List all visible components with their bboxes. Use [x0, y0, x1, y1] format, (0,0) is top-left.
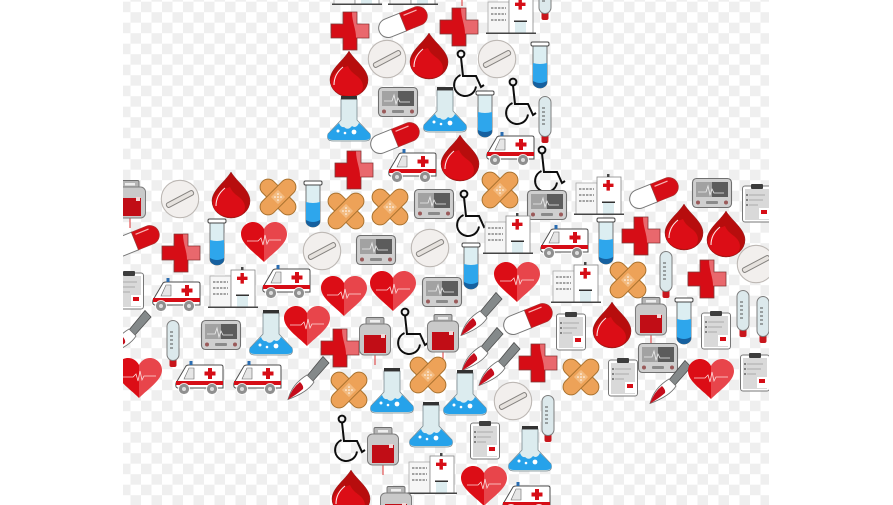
icon: pill [378, 6, 428, 38]
icon: scalpel [110, 310, 151, 354]
icon: test tube [531, 42, 549, 88]
icon: monitor [414, 190, 454, 218]
icon: hospital [551, 262, 601, 303]
icon: thermometer [167, 320, 179, 367]
icon: ambulance [153, 278, 200, 312]
icon: thermometer [660, 252, 672, 298]
icon: flask [328, 96, 370, 141]
icon: tablet [494, 382, 532, 420]
icon: test tube [304, 181, 322, 227]
icon: monitor [692, 178, 732, 208]
icon: heart [688, 359, 734, 399]
icon: monitor [378, 88, 418, 116]
icon: monitor [202, 320, 240, 350]
icon: thermometer [757, 296, 769, 343]
icon: flask [250, 310, 292, 355]
icon: monitor [356, 236, 396, 264]
icon: clipboard [608, 358, 638, 396]
icon: ambulance [176, 361, 223, 394]
icon: monitor [528, 190, 566, 220]
icon: ambulance [234, 361, 281, 394]
icon: thermometer [539, 0, 551, 20]
icon: clipboard [114, 271, 144, 309]
icon: red cross [688, 260, 726, 298]
icon: hospital [388, 0, 438, 5]
icon: pill [627, 175, 681, 211]
icon: hospital [574, 174, 624, 215]
icon: thermometer [737, 290, 749, 337]
icon: test tube [675, 298, 693, 344]
icon: wheelchair [454, 51, 484, 96]
icon: wheelchair [535, 147, 565, 192]
icon: ambulance [389, 149, 436, 182]
icon: test tube [462, 243, 480, 289]
icon: scalpel [461, 292, 502, 336]
icon: pill [370, 122, 420, 154]
icon: wheelchair [457, 191, 487, 236]
icon: bandage [607, 259, 649, 301]
icon: clipboard [470, 421, 500, 459]
icon: red cross [162, 234, 200, 272]
icon: bandage [372, 188, 408, 226]
icon: ambulance [487, 132, 534, 166]
icon: red cross [331, 12, 369, 50]
icon: tablet [737, 245, 775, 283]
icon: blood drop [593, 302, 631, 348]
icon: monitor [638, 344, 678, 372]
icon: blood drop [410, 33, 448, 79]
icon: wheelchair [335, 416, 365, 461]
icon: bandage [260, 178, 296, 216]
icon: heart [284, 306, 330, 346]
icon: red cross [519, 344, 557, 382]
icon: tablet [368, 40, 406, 78]
icon: blood bag [368, 428, 398, 475]
icon: hospital [486, 0, 536, 34]
icon: thermometer [542, 396, 554, 442]
icon: blood drop [707, 211, 745, 257]
icon: bandage [328, 192, 364, 230]
icon: tablet [303, 232, 341, 270]
icon: flask [371, 368, 413, 413]
icon: red cross [321, 329, 359, 367]
icon: monitor [422, 278, 462, 306]
icon: tablet [411, 229, 449, 267]
icon: scalpel [462, 328, 503, 370]
icon: bandage [407, 354, 449, 396]
icon: blood bag [360, 318, 390, 365]
icon: heart [494, 262, 540, 302]
illustration: medical cross made of icons [123, 0, 769, 505]
icon: tablet [478, 40, 516, 78]
icon: red cross [440, 8, 478, 46]
icon: clipboard [740, 353, 770, 391]
icon: red cross [335, 151, 373, 189]
icon: heart [461, 466, 507, 505]
icon: heart [241, 222, 287, 262]
icon: hospital [208, 267, 258, 308]
icon: test tube [208, 219, 226, 265]
icon: wheelchair [398, 309, 428, 354]
icon: flask [424, 87, 466, 132]
icon: thermometer [539, 96, 551, 143]
icon: scalpel [288, 356, 329, 400]
icon: test tube [476, 91, 494, 137]
icon: tablet [161, 180, 199, 218]
icon: bandage [482, 172, 518, 208]
icon: hospital [332, 0, 382, 5]
checkerboard background [123, 0, 769, 505]
icon: bandage [560, 356, 602, 398]
icon: blood drop [212, 172, 250, 218]
icon: scalpel [650, 360, 691, 404]
icon: pill [501, 301, 555, 337]
icon: pill [108, 223, 162, 259]
icon: hospital [483, 213, 533, 254]
icon: blood bag [380, 486, 412, 505]
icon: clipboard [556, 312, 586, 350]
icon: blood drop [665, 204, 703, 250]
icon: ambulance [503, 482, 550, 505]
icon: blood drop [332, 470, 370, 505]
icon: bandage [328, 369, 370, 411]
icon: test tube [597, 218, 615, 264]
icon: ambulance [263, 265, 310, 298]
icon: ambulance [541, 225, 588, 258]
icon: hospital [407, 453, 457, 494]
icon: scalpel [479, 342, 520, 386]
icon: clipboard [702, 311, 730, 349]
icon: blood bag [636, 298, 666, 345]
icon cross [108, 0, 775, 505]
icon: flask [410, 402, 452, 447]
icon: blood bag [462, 0, 463, 6]
icon: flask [509, 426, 551, 471]
icon: blood bag [428, 314, 458, 362]
icon: clipboard [742, 184, 772, 222]
icon: red cross [622, 217, 660, 255]
icon: blood bag [123, 180, 146, 228]
icon: heart [321, 276, 367, 316]
icon: flask [444, 370, 486, 415]
icon: wheelchair [506, 79, 536, 124]
icon: heart [370, 271, 416, 311]
icon: blood drop [330, 51, 368, 97]
icon: heart [116, 358, 162, 398]
icon: blood drop [441, 135, 479, 181]
